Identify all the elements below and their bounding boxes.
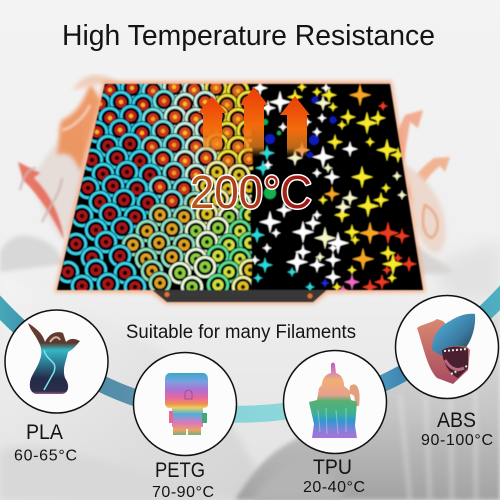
arrow: left <box>198 96 227 153</box>
teal blue arc band <box>0 285 500 414</box>
label: PLA: PLA <box>26 421 63 444</box>
filament card: PLA <box>5 310 108 464</box>
label: ABS: ABS <box>437 409 476 432</box>
title: High Temperature Resistance <box>62 20 435 52</box>
icon: PETG rainbow robot <box>134 352 236 456</box>
icon: ABS shark head <box>396 296 498 398</box>
temperature: PLA: 60-65°C <box>14 448 77 464</box>
heat smoke and flames, left <box>0 75 120 272</box>
icon: PLA vase <box>5 310 108 413</box>
temperature label 200°C: 200°C <box>190 166 312 218</box>
build plate <box>56 75 423 302</box>
plate left: ring pattern <box>59 83 254 291</box>
icon: TPU rainbow stein <box>284 350 386 454</box>
plate tab <box>150 288 329 302</box>
arrow: right <box>280 96 310 157</box>
filament card: TPU <box>284 350 386 496</box>
plate glow <box>57 83 423 302</box>
subheading: Suitable for many Filaments <box>126 322 356 343</box>
plate right: star pattern <box>249 80 417 295</box>
filament card: ABS <box>396 296 498 449</box>
heat smoke and flames, right <box>397 110 452 280</box>
label: PETG: PETG <box>155 459 205 482</box>
label: TPU: TPU <box>313 456 352 479</box>
temperature: ABS: 90-100°C <box>421 432 493 449</box>
temperature: TPU: 20-40°C <box>303 479 365 496</box>
arrow: centre <box>240 87 268 157</box>
heat arrows <box>198 87 310 157</box>
filament card: PETG <box>134 352 236 500</box>
